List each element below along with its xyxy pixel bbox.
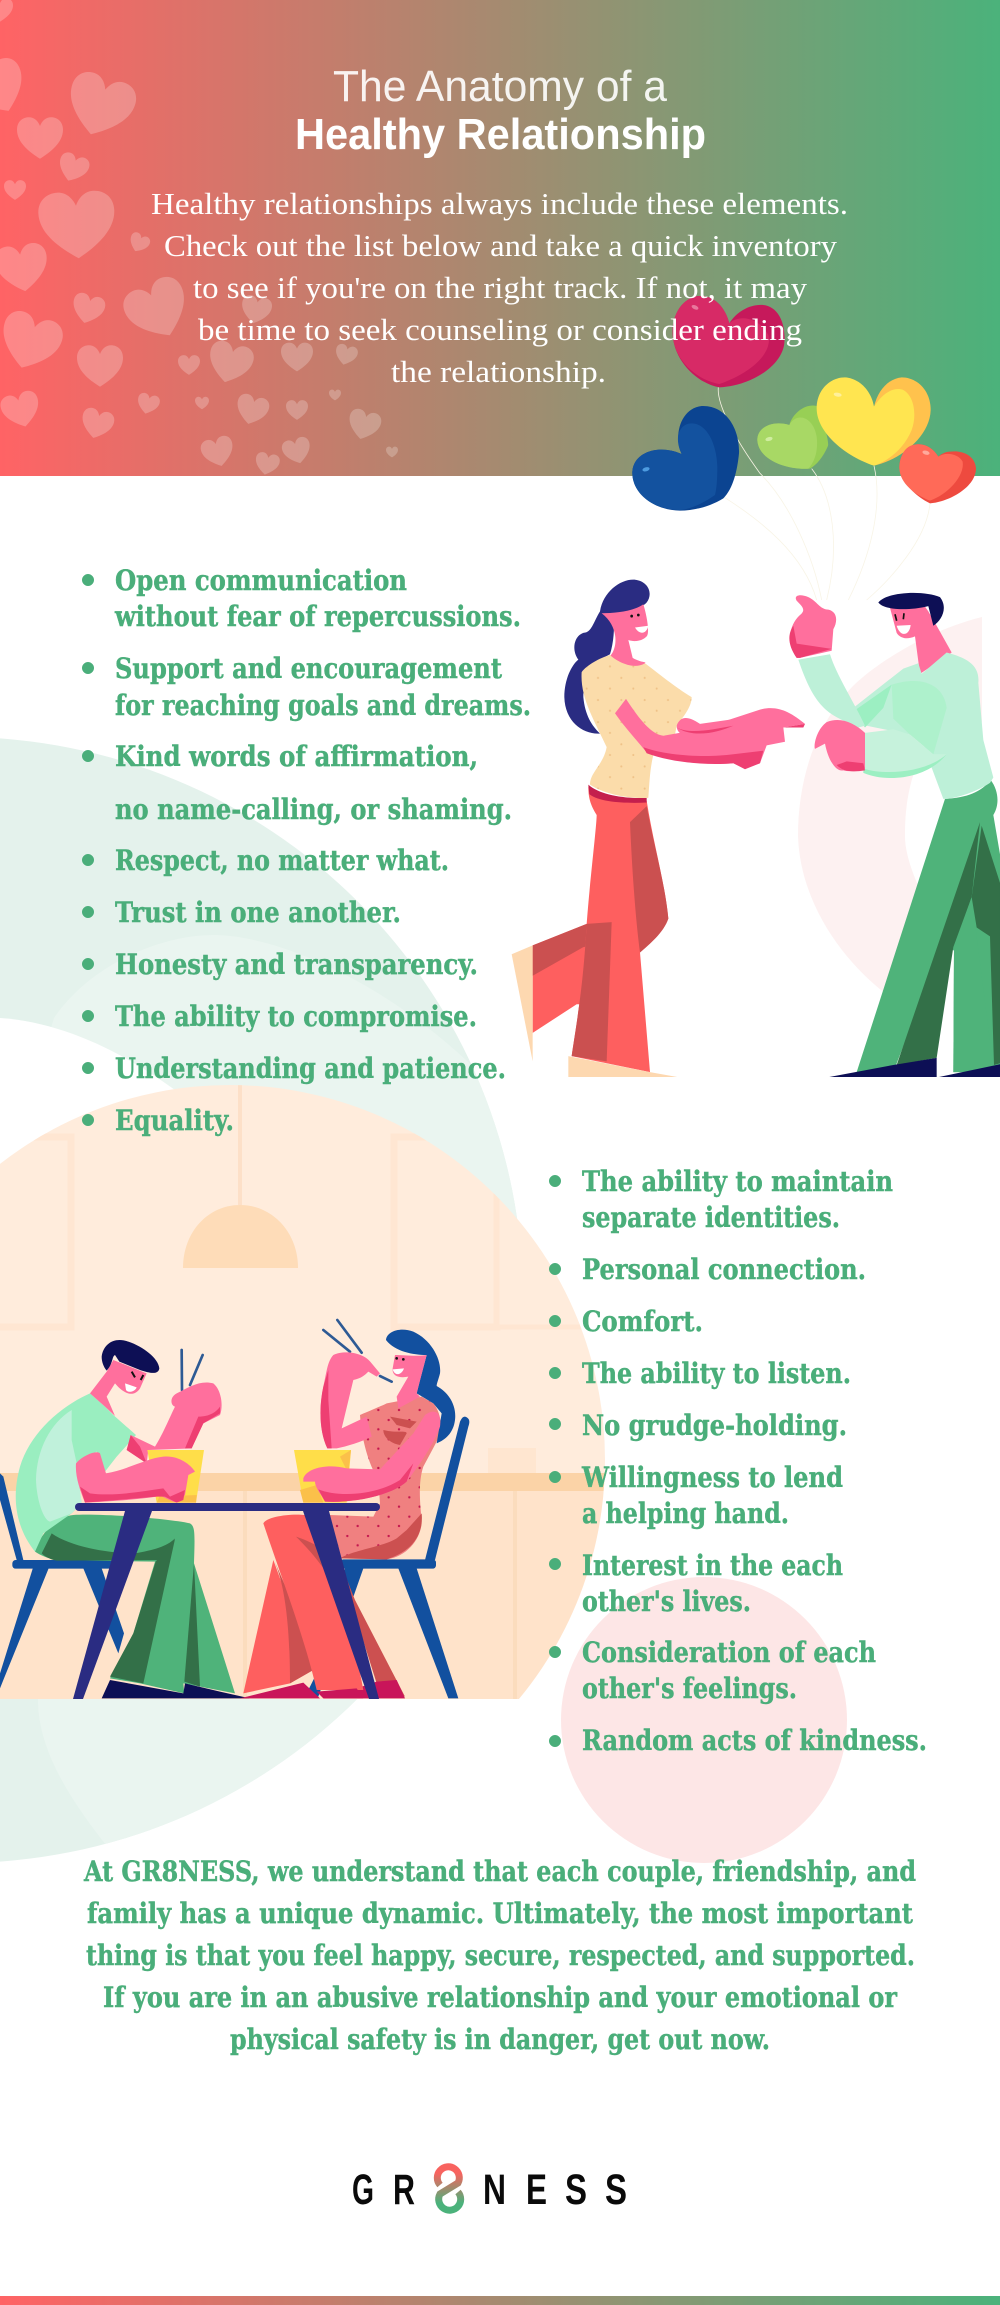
intro paragraph: Check out the list below and take a quick inventory <box>164 228 838 263</box>
balloon: blue heart <box>632 406 739 511</box>
man figure <box>789 593 1000 1077</box>
logo: GR8NESS: E <box>526 2166 547 2214</box>
closing paragraph: physical safety is in danger, get out now. <box>230 2023 770 2056</box>
woman eating <box>240 1320 455 1698</box>
background: pale green circle <box>0 738 517 1862</box>
bullet list: first column: for reaching goals and dreams. <box>115 689 531 722</box>
background: pink crescent behind man <box>798 617 982 1010</box>
bullet list: first column: Equality. <box>115 1104 234 1137</box>
logo: GR8NESS: N <box>483 2166 506 2214</box>
logo: GR8NESS: S <box>565 2166 587 2214</box>
title: The Anatomy of a <box>333 62 668 111</box>
kitchen backdrop <box>0 1080 620 1701</box>
intro paragraph: to see if you're on the right track. If not, it may <box>193 270 808 305</box>
bullet list: second column: The ability to maintain <box>582 1165 893 1198</box>
balloon strings <box>718 387 930 600</box>
bullet list: first column: Respect, no matter what. <box>115 844 449 877</box>
dining table <box>73 1503 380 1699</box>
bullet list: first column: Support and encouragement <box>115 652 502 685</box>
bullet list: first column: The ability to compromise. <box>115 1000 477 1033</box>
bullet list: second column: Consideration of each <box>582 1636 876 1669</box>
closing paragraph <box>83 1855 916 2056</box>
logo: GR8NESS: S <box>605 2166 627 2214</box>
right chair <box>305 1417 469 1698</box>
bullet list: second column: No grudge-holding. <box>582 1409 847 1442</box>
intro paragraph: Healthy relationships always include these elements. <box>151 186 848 221</box>
bullet list: first column: without fear of repercussions. <box>114 600 521 633</box>
bullet list: second column: Comfort. <box>582 1305 703 1338</box>
bullet list: second column: a helping hand. <box>582 1497 789 1530</box>
illustration: couple talking <box>512 580 1000 1077</box>
decorative floating hearts <box>0 0 398 477</box>
logo: GR8NESS: G <box>352 2166 374 2214</box>
balloon: crimson heart <box>673 296 785 387</box>
bullet list: second column <box>549 1165 927 1757</box>
woman figure <box>512 580 805 1077</box>
intro paragraph: the relationship. <box>391 354 606 389</box>
bullet list: first column: Understanding and patience. <box>115 1052 506 1085</box>
bullet list: second column: other's feelings. <box>582 1672 797 1705</box>
bullet list: second column: Interest in the each <box>582 1549 843 1582</box>
background: pale pink circle <box>561 1577 847 1863</box>
left chair <box>0 1473 124 1688</box>
header band <box>0 0 1000 476</box>
intro paragraph <box>151 186 848 389</box>
title <box>295 62 706 159</box>
bullet list: first column: Open communication <box>115 564 407 597</box>
bullet list: first column: Honesty and transparency. <box>115 948 478 981</box>
bullet list: second column: other's lives. <box>582 1585 751 1618</box>
logo: GR8NESS: R <box>393 2166 415 2214</box>
man eating <box>16 1340 250 1698</box>
intro paragraph: be time to seek counseling or consider ending <box>198 312 802 347</box>
balloon: yellow heart <box>817 377 931 466</box>
bullet list: first column: no name-calling, or shaming. <box>115 793 512 826</box>
balloon: lime heart <box>757 406 828 469</box>
bullet list: first column <box>82 564 531 1137</box>
title: Healthy Relationship <box>295 110 706 159</box>
illustration: couple eating at a table <box>0 1080 620 1701</box>
logo: GR8NESS <box>352 2166 627 2214</box>
bullet list: second column: The ability to listen. <box>582 1357 851 1390</box>
bullet list: first column: Kind words of affirmation, <box>115 740 478 773</box>
bottom gradient bar <box>0 2296 1000 2305</box>
bullet list: second column: separate identities. <box>582 1201 840 1234</box>
balloon: red heart <box>899 444 976 503</box>
bullet list: second column: Willingness to lend <box>581 1461 843 1494</box>
bullet list: first column: Trust in one another. <box>115 896 401 929</box>
bullet list: second column: Random acts of kindness. <box>582 1724 927 1757</box>
bullet list: second column: Personal connection. <box>582 1253 866 1286</box>
